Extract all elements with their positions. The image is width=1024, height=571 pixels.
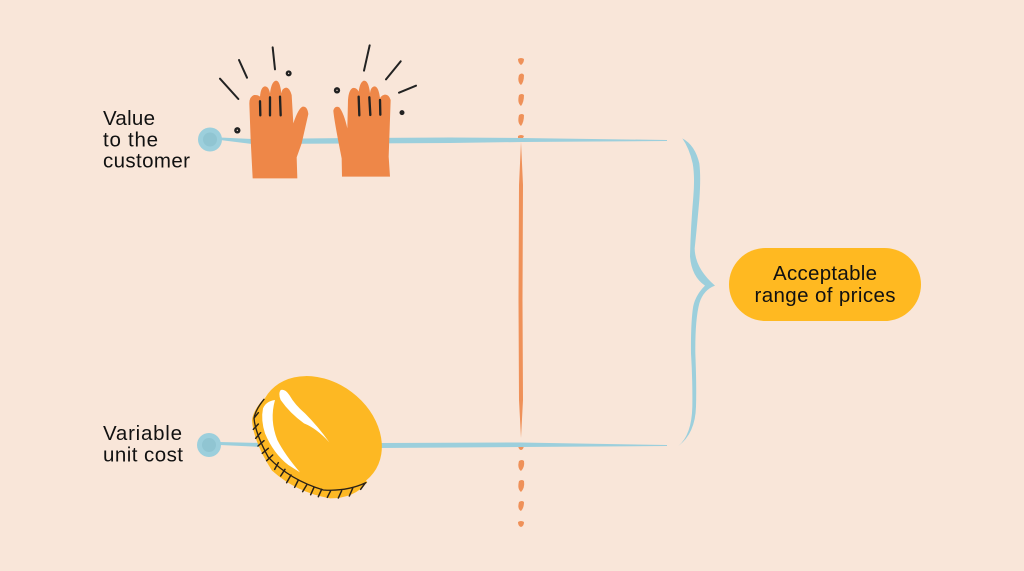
callout: acceptable range of prices <box>729 248 921 321</box>
dot: value to the customer <box>198 128 222 152</box>
bottom line: variable unit cost <box>220 442 667 448</box>
finger lines <box>260 97 380 115</box>
dashed vertical line bottom <box>518 446 524 527</box>
label: value to the customer: to the <box>103 128 158 152</box>
icon: coin <box>237 352 404 514</box>
callout: acceptable range of prices: Acceptable <box>773 262 877 285</box>
solid vertical line <box>518 142 523 438</box>
dashed vertical line top <box>518 58 524 138</box>
label: value to the customer: customer <box>103 150 190 172</box>
burst marks <box>220 45 416 99</box>
icon: raised hands <box>220 45 416 178</box>
label: variable unit cost: unit cost <box>103 444 183 466</box>
label: value to the customer: Value <box>103 107 155 130</box>
callout: acceptable range of prices: range of prices <box>754 284 896 307</box>
coin edge ticks <box>253 399 366 498</box>
dot: variable unit cost <box>197 433 221 457</box>
burst dots <box>234 70 404 133</box>
coin highlights <box>262 390 329 472</box>
curly brace <box>678 138 715 446</box>
top line: value to the customer <box>220 138 667 144</box>
label: variable unit cost: Variable <box>103 422 182 445</box>
